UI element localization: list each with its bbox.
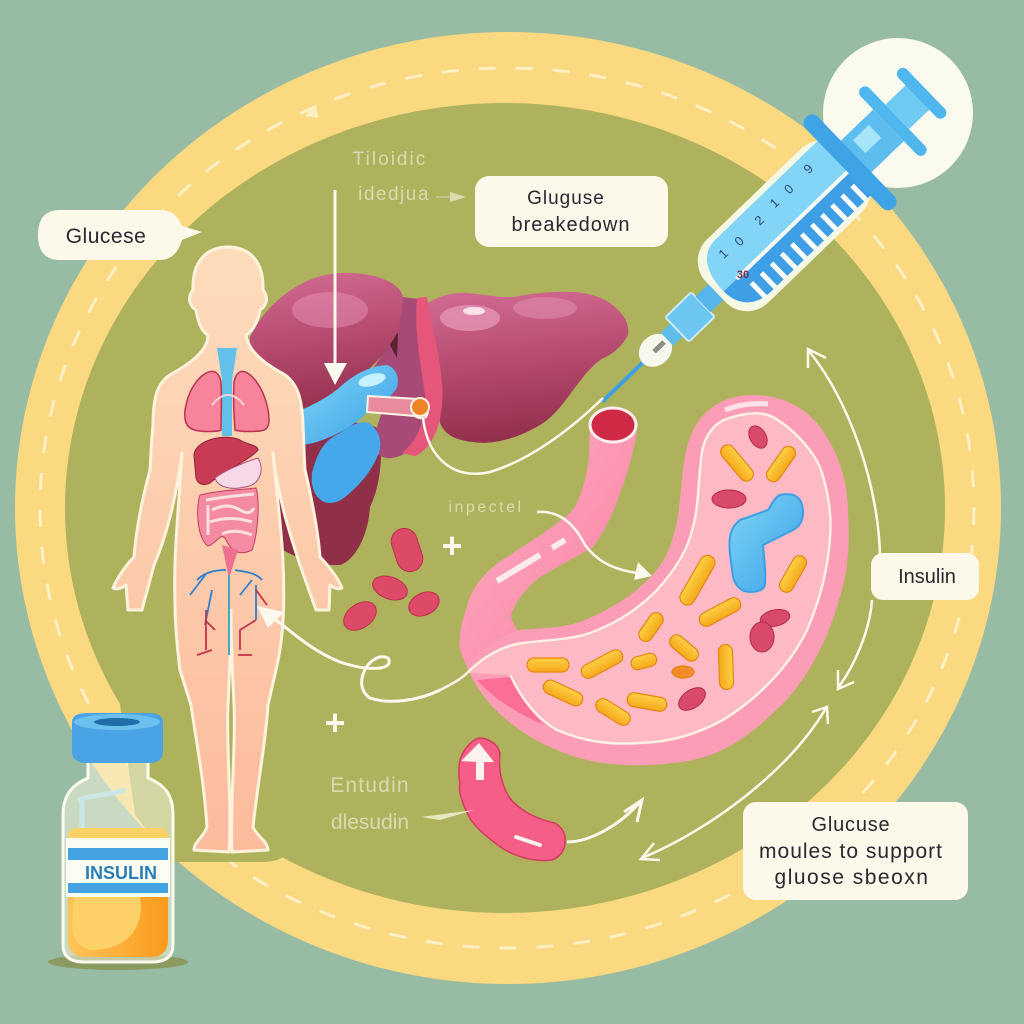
cycle arrow right upper (808, 349, 880, 560)
flange and plunger (840, 109, 904, 173)
syringe: 0 (781, 181, 797, 197)
lower abdomen vessel (222, 545, 238, 578)
cycle arrow bottom (641, 707, 828, 860)
organ outer (467, 395, 849, 765)
inspectel caption: inpectel (448, 499, 524, 516)
syringe disc background (823, 38, 973, 188)
glucose molecules label (743, 802, 968, 900)
pink stomach organ (440, 395, 849, 765)
right lobe (428, 292, 628, 443)
intestines (198, 488, 258, 553)
blue capsule in organ (729, 494, 803, 592)
needle (602, 359, 647, 402)
vessels (190, 570, 267, 655)
white arrow into duct (324, 190, 347, 385)
glucose breakdown label (475, 176, 668, 247)
entudin caption: Entudin (330, 774, 410, 797)
tiloidic caption: idedjua (358, 184, 430, 205)
barrel (685, 128, 883, 324)
human body (113, 247, 342, 852)
glucose label (38, 210, 202, 260)
capsules (527, 442, 809, 728)
red blood cells (338, 525, 443, 636)
left lobe (250, 273, 403, 420)
tiloidic caption: Tiloidic (353, 149, 427, 170)
small liver (194, 437, 258, 485)
middle purple section (372, 297, 432, 458)
lower dark lobe (270, 423, 381, 565)
insulin label: Insulin (898, 566, 956, 588)
organ inner (467, 413, 831, 744)
entudin caption: dlesudin (331, 811, 409, 834)
syringe: 9 (800, 161, 816, 177)
glucose breakdown label: Gluguse (527, 188, 605, 209)
syringe: 1 (767, 195, 782, 211)
syringe: 1 (715, 246, 731, 261)
windpipe (217, 348, 237, 436)
syringe: 0 (731, 233, 747, 249)
insulin label (871, 553, 979, 600)
syringe small mark: 30 (737, 269, 749, 281)
tiloidic caption (353, 149, 466, 205)
syringe: 2 (751, 212, 767, 228)
glucose molecules label: moules to support (759, 840, 943, 863)
arrow from tube (567, 800, 642, 842)
tube (459, 427, 637, 670)
plus sign lower: + (324, 702, 346, 743)
cycle arrow right lower (838, 600, 872, 689)
insulin vial (48, 713, 188, 970)
glucose molecules label: Glucuse (812, 814, 890, 836)
pink ligament strip (402, 297, 442, 456)
pink tube segment (459, 738, 565, 861)
liver (250, 273, 628, 565)
insulin vial: INSULIN (85, 863, 157, 883)
glucose breakdown label: breakedown (512, 214, 630, 236)
curl arrow to body (257, 606, 440, 701)
small stomach (215, 458, 261, 488)
blue duct (298, 365, 429, 503)
syringe (558, 44, 970, 447)
glucose molecules label: gluose sbeoxn (775, 866, 929, 889)
glucose label: Glucese (66, 225, 146, 248)
plus sign upper: + (441, 525, 463, 566)
entudin caption (330, 774, 474, 834)
inspectel caption (448, 499, 652, 580)
connector from needle to liver (423, 398, 603, 474)
lungs (185, 371, 269, 432)
